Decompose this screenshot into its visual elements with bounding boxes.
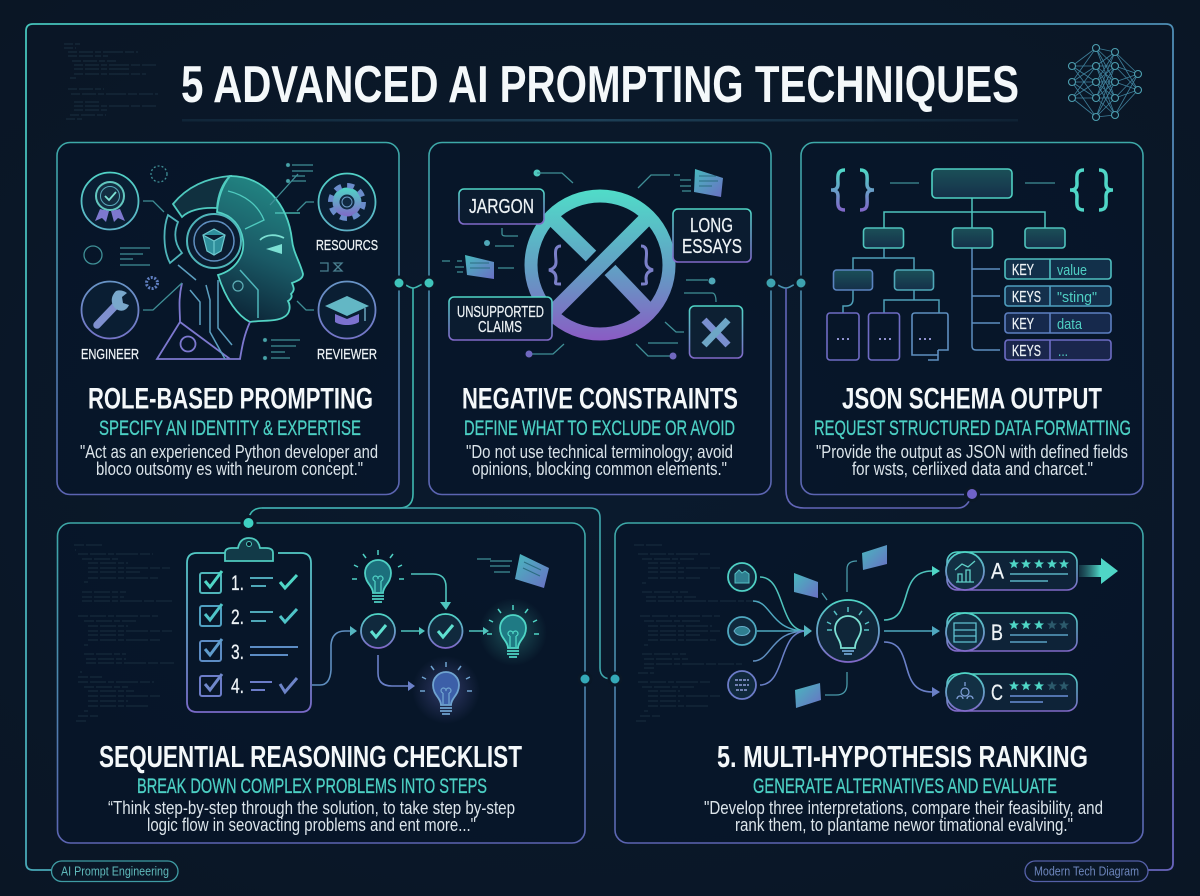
footer tag: ai prompt engineering: AI Prompt Engineering bbox=[61, 864, 169, 878]
code snippet bbox=[74, 545, 174, 721]
tag: jargon: JARGON bbox=[469, 196, 534, 218]
converging arrows bbox=[753, 577, 806, 685]
circuit marks bbox=[442, 170, 716, 360]
prompt example bbox=[108, 797, 515, 835]
footer tag: modern tech diagram bbox=[1025, 861, 1148, 882]
heading: 5. MULTI-HYPOTHESIS RANKING bbox=[717, 739, 1088, 774]
big arrow bbox=[1079, 558, 1118, 584]
tag: unsupported claims: CLAIMS bbox=[478, 319, 522, 336]
prohibition symbol bbox=[531, 196, 669, 334]
key value rows: data bbox=[1057, 316, 1083, 333]
key value rows: KEY bbox=[1012, 316, 1034, 333]
tag: jargon bbox=[459, 189, 544, 224]
rank c bbox=[946, 673, 1077, 711]
key value rows: value bbox=[1057, 262, 1087, 279]
icons: data cards bbox=[465, 169, 723, 279]
panel: role-based prompting bbox=[57, 142, 399, 494]
prompt example: "Develop three interpretations, compare their feasibility, and bbox=[704, 797, 1103, 818]
icon: clipboard checklist: 4. bbox=[231, 675, 244, 698]
rank a: A bbox=[991, 558, 1004, 584]
key value rows: KEYS bbox=[1012, 343, 1041, 360]
prompt example: "Do not use technical terminology; avoid bbox=[466, 441, 733, 462]
idea hub bbox=[817, 600, 879, 662]
subtitle: DEFINE WHAT TO EXCLUDE OR AVOID bbox=[464, 417, 735, 440]
icon: right braces bbox=[1070, 170, 1113, 210]
key value rows: ... bbox=[1058, 343, 1068, 360]
icon: neural network bbox=[1068, 44, 1142, 120]
heading: ROLE-BASED PROMPTING bbox=[88, 382, 373, 416]
panel: json schema output bbox=[801, 142, 1143, 494]
prompt example: rank them, to plantame newor timational evalving." bbox=[735, 814, 1073, 835]
prompt example: “Think step-by-step through the solution, to take step by-step bbox=[108, 797, 515, 818]
icon: clipboard checklist bbox=[187, 538, 311, 712]
prompt example bbox=[704, 797, 1103, 835]
decorative circuit marks bbox=[84, 164, 342, 360]
role labels: ENGINEER bbox=[81, 347, 139, 363]
panel frame bbox=[58, 523, 585, 843]
prompt example bbox=[466, 441, 733, 479]
subtitle: GENERATE ALTERNATIVES AND EVALUATE bbox=[753, 775, 1057, 798]
flow diagram bbox=[312, 550, 547, 724]
key value rows: KEYS bbox=[1012, 289, 1041, 306]
footer tag: ai prompt engineering bbox=[52, 861, 178, 882]
icon: clipboard checklist: 3. bbox=[231, 641, 244, 664]
schema tree bbox=[827, 169, 1065, 360]
icon: badge bbox=[82, 172, 138, 230]
tag: long essays: ESSAYS bbox=[682, 236, 742, 258]
prompt example: "Provide the output as JSON with defined fields bbox=[816, 441, 1128, 462]
heading: SEQUENTIAL REASONING CHECKLIST bbox=[99, 739, 522, 774]
prompt example bbox=[80, 441, 378, 479]
tag: unsupported claims: UNSUPPORTED bbox=[457, 304, 544, 321]
icon: clipboard checklist: 2. bbox=[231, 606, 244, 629]
rank b: B bbox=[991, 620, 1003, 645]
icon: graduation cap bbox=[318, 282, 376, 338]
icon: x box bbox=[690, 306, 742, 358]
panel: sequential reasoning checklist bbox=[58, 523, 585, 843]
code snippet bbox=[634, 545, 760, 721]
prompt example bbox=[816, 441, 1128, 479]
rank a bbox=[946, 552, 1077, 590]
panel frame bbox=[801, 142, 1143, 494]
panel frame bbox=[615, 523, 1143, 843]
heading: JSON SCHEMA OUTPUT bbox=[842, 382, 1102, 416]
panel frame bbox=[57, 142, 399, 494]
icons: data cards bbox=[794, 545, 887, 708]
output arrowheads bbox=[932, 566, 940, 697]
icon: left braces bbox=[831, 170, 874, 210]
prompt example: bloco outsomy es with neurom concept." bbox=[96, 458, 363, 479]
tag: long essays: LONG bbox=[690, 215, 733, 237]
subtitle: SPECIFY AN IDENTITY & EXPERTISE bbox=[99, 417, 361, 440]
icon: data card bbox=[477, 554, 549, 588]
key value rows: "sting" bbox=[1057, 289, 1097, 306]
connectors between panels bbox=[248, 283, 972, 679]
icon: gear bbox=[318, 174, 376, 230]
panel: multi-hypothesis ranking bbox=[615, 523, 1143, 843]
panel frame bbox=[429, 142, 771, 494]
prompt example: for wsts, cerliixed data and charcet." bbox=[852, 458, 1093, 479]
role labels: RESOURCS bbox=[316, 238, 378, 254]
key value rows: KEY bbox=[1012, 262, 1034, 279]
panel: negative constraints bbox=[429, 142, 771, 494]
rank b bbox=[946, 613, 1077, 651]
heading: NEGATIVE CONSTRAINTS bbox=[462, 382, 738, 416]
prompt example: logic flow in seovacting problems and ent more..." bbox=[147, 814, 476, 835]
title underline bbox=[182, 119, 1018, 122]
output curves bbox=[884, 571, 932, 692]
role labels bbox=[81, 238, 378, 363]
head illustration bbox=[157, 176, 303, 359]
tag: unsupported claims bbox=[449, 297, 552, 340]
icon: clipboard checklist: 1. bbox=[231, 572, 244, 595]
prompt example: "Act as an experienced Python developer and bbox=[80, 441, 378, 462]
role labels: REVIEWER bbox=[317, 347, 377, 363]
subtitle: BREAK DOWN COMPLEX PROBLEMS INTO STEPS bbox=[137, 775, 487, 798]
prompt example: opinions, blocking common elements." bbox=[472, 458, 727, 479]
footer tag: modern tech diagram: Modern Tech Diagram bbox=[1034, 864, 1139, 878]
tag: long essays bbox=[673, 209, 751, 262]
key value rows bbox=[1005, 259, 1111, 360]
rank c: C bbox=[991, 680, 1003, 705]
arrowhead bbox=[804, 625, 812, 637]
icon: wrench bbox=[82, 282, 138, 338]
code snippet: header bbox=[64, 44, 158, 119]
connector nodes bbox=[242, 277, 978, 685]
input nodes bbox=[728, 563, 756, 699]
